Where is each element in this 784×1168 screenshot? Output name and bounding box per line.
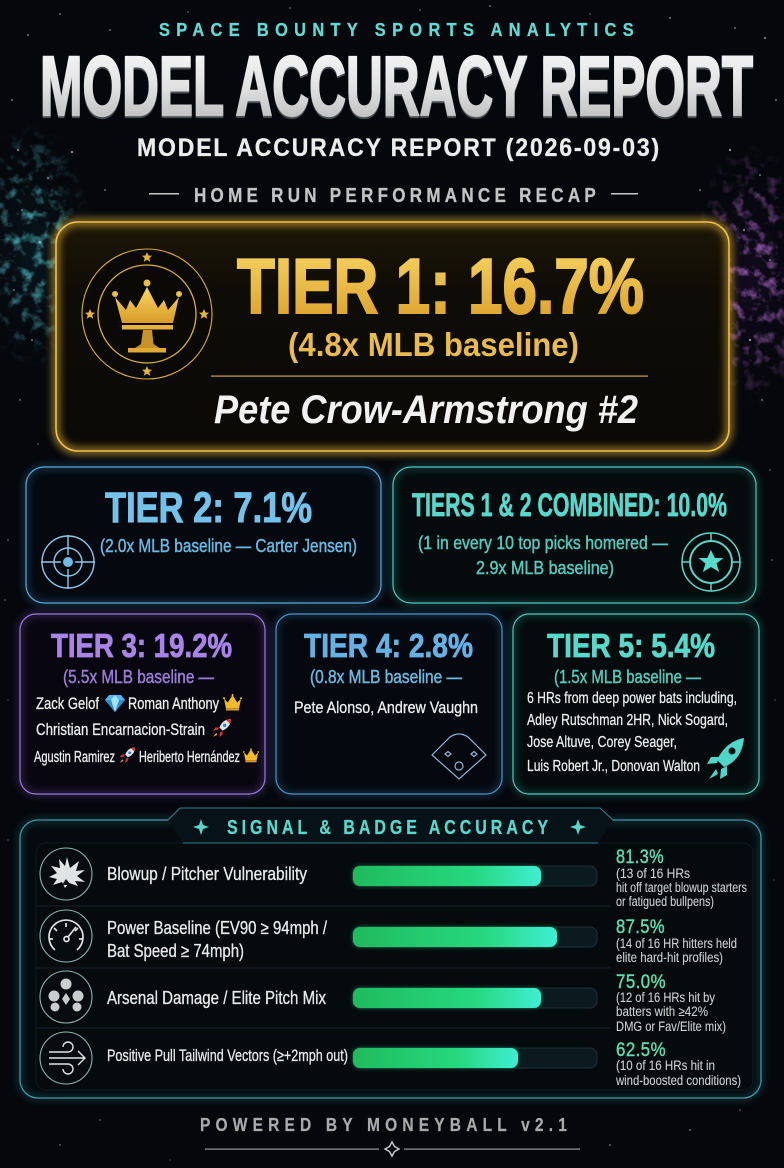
- tier 3 player row 1: [36, 694, 242, 713]
- value: 75.0%: [616, 972, 666, 993]
- row: power baseline: [40, 910, 737, 965]
- value: (14 of 16 HR hitters held: [616, 936, 737, 951]
- tier 3 player row 3: [34, 747, 259, 766]
- value: batters with ≥42%: [616, 1004, 708, 1019]
- label: Blowup / Pitcher Vulnerability: [107, 864, 307, 884]
- value: (10 of 16 HRs hit in: [616, 1058, 715, 1073]
- row: tailwind vectors: [40, 1032, 741, 1088]
- subtitle: MODEL ACCURACY REPORT (2026-09-03): [137, 134, 661, 162]
- tier 3 player row 1: Zack Gelof: [36, 694, 99, 713]
- header star left: [193, 819, 209, 835]
- tier 3 player row 1: Roman Anthony: [128, 694, 219, 713]
- combined detail: (1 in every 10 top picks homered —: [418, 532, 668, 553]
- value: hit off target blowup starters: [616, 880, 747, 895]
- value: 87.5%: [616, 917, 665, 938]
- panel: tier 5: [513, 614, 759, 794]
- icon: star target: [682, 533, 740, 591]
- footer ornament: [205, 1142, 580, 1156]
- header text: SIGNAL & BADGE ACCURACY: [227, 817, 552, 839]
- tier 4 heading: TIER 4: 2.8%: [304, 627, 473, 664]
- icon: explosion: [40, 848, 92, 900]
- label: Bat Speed ≥ 74mph): [107, 941, 244, 961]
- label: Power Baseline (EV90 ≥ 94mph /: [107, 918, 327, 938]
- tier 2 detail: (2.0x MLB baseline — Carter Jensen): [100, 535, 357, 556]
- tier 4 players: Pete Alonso, Andrew Vaughn: [294, 698, 478, 717]
- icon: pitch clusters: [40, 971, 92, 1023]
- tier 5 heading: TIER 5: 5.4%: [547, 627, 715, 664]
- tier 3 player row 3: Heriberto Hernández: [139, 749, 240, 766]
- tier 3 player row 3: Agustin Ramirez: [34, 749, 115, 766]
- tier 5 players: Adley Rutschman 2HR, Nick Sogard,: [527, 712, 728, 729]
- value: DMG or Fav/Elite mix): [616, 1019, 726, 1034]
- tier 1 heading: TIER 1: 16.7%: [237, 242, 644, 330]
- row: blowup: [40, 847, 747, 909]
- icon: gauge: [40, 910, 92, 962]
- tier 3 heading: TIER 3: 19.2%: [51, 627, 232, 664]
- tier 5 players: Luis Robert Jr., Donovan Walton: [527, 758, 700, 775]
- value: [616, 972, 726, 1034]
- value: wind-boosted conditions): [615, 1073, 741, 1088]
- label: Arsenal Damage / Elite Pitch Mix: [107, 988, 326, 1008]
- bar: 62.5: [353, 1048, 597, 1068]
- tier 5 detail: (1.5x MLB baseline —: [554, 666, 701, 687]
- icon: crown emblem: [82, 249, 212, 379]
- value: [616, 917, 737, 965]
- panel: tier 4: [276, 614, 502, 794]
- value: (12 of 16 HRs hit by: [616, 990, 715, 1005]
- tier 5 players: Jose Altuve, Corey Seager,: [527, 734, 677, 751]
- tier 3 detail: (5.5x MLB baseline —: [63, 666, 214, 687]
- bar: 81.3: [353, 866, 597, 886]
- tier 3 player row 2: Christian Encarnacion-Strain: [36, 720, 205, 739]
- value: (13 of 16 HRs: [616, 866, 690, 881]
- panel: tier 3: [20, 614, 265, 794]
- tier 4 detail: (0.8x MLB baseline —: [310, 666, 462, 687]
- combined detail: 2.9x MLB baseline): [476, 557, 614, 578]
- bar: 75.0: [353, 988, 597, 1008]
- panel: tier 1: [56, 222, 729, 451]
- section label: HOME RUN PERFORMANCE RECAP: [194, 185, 600, 207]
- tier 1 multiplier: (4.8x MLB baseline): [288, 326, 579, 363]
- label: Positive Pull Tailwind Vectors (≥+2mph out): [107, 1047, 348, 1065]
- section header tab: [168, 808, 613, 843]
- icon: rocket: [707, 738, 744, 779]
- footer text: POWERED BY MONEYBALL v2.1: [200, 1115, 572, 1135]
- tier 2 heading: TIER 2: 7.1%: [105, 484, 312, 532]
- icon: baseball diamond: [432, 734, 486, 779]
- icon: target: [41, 535, 95, 589]
- panel: tiers 1 and 2 combined: [393, 467, 756, 603]
- value: [616, 847, 747, 909]
- bar: 87.5: [353, 927, 597, 947]
- tier 1 player: Pete Crow-Armstrong #2: [214, 388, 638, 432]
- combined detail: [418, 532, 668, 578]
- tier 5 players: [527, 690, 737, 775]
- eyebrow: brand: SPACE BOUNTY SPORTS ANALYTICS: [159, 20, 640, 40]
- value: 81.3%: [616, 847, 664, 868]
- header star right: [570, 819, 586, 835]
- label: [107, 918, 327, 961]
- value: or fatigued bullpens): [616, 894, 714, 909]
- icon: wind: [40, 1032, 92, 1084]
- value: [615, 1040, 741, 1088]
- panel: signal and badge accuracy: [20, 808, 761, 1098]
- value: 62.5%: [616, 1040, 666, 1061]
- value: elite hard-hit profiles): [616, 950, 723, 965]
- panel: tier 2: [26, 467, 381, 603]
- row: arsenal damage: [40, 971, 726, 1034]
